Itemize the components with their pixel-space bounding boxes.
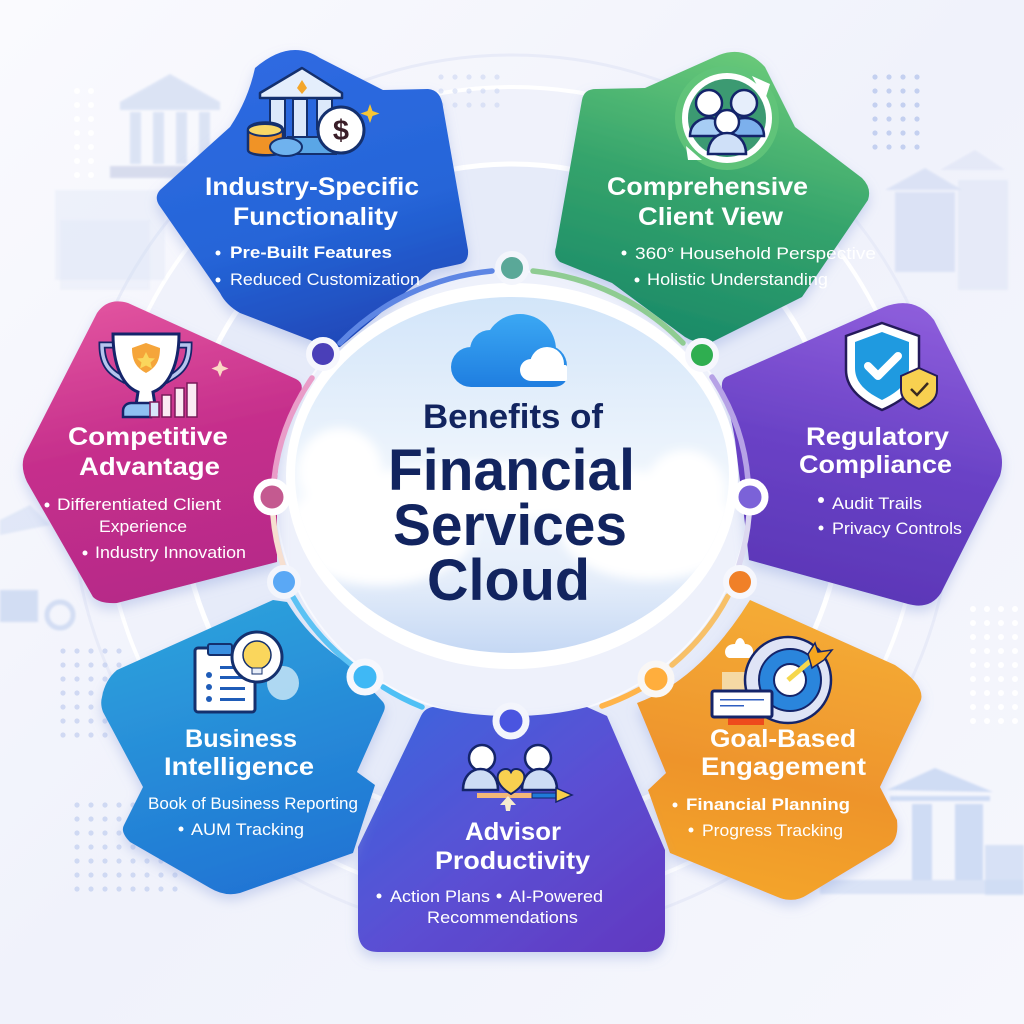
icon: trophy: [102, 334, 228, 417]
bullets: 360° Household Perspective: [635, 244, 876, 263]
heading: Business: [185, 725, 297, 753]
title: Financial: [388, 438, 635, 503]
heading: [205, 173, 419, 231]
heading: Client View: [638, 203, 784, 231]
bullets: Industry Innovation: [95, 543, 246, 562]
bullets: [818, 494, 962, 538]
heading: Compliance: [799, 451, 952, 479]
heading: [607, 173, 808, 231]
heading: [701, 725, 867, 781]
panel: competitive advantage: [23, 301, 302, 603]
heading: [68, 423, 228, 481]
bullets: [672, 795, 850, 840]
panel shape: [358, 707, 665, 952]
bullets: Book of Business Reporting: [148, 794, 358, 813]
icon: clipboard and bulb: [195, 632, 299, 712]
heading: Advisor: [465, 818, 561, 846]
heading: Industry-Specific: [205, 173, 419, 201]
connector nodes: [257, 254, 765, 736]
bullets: Experience: [99, 517, 187, 536]
heading: Goal-Based: [710, 725, 856, 753]
icon: cloud: [451, 314, 567, 387]
bullets: Financial Planning: [686, 795, 850, 814]
bullets: Pre-Built Features: [230, 243, 392, 262]
panel shape: [23, 301, 302, 603]
bullets: [44, 495, 246, 562]
faint building upper right: [885, 150, 1008, 290]
bullets: Audit Trails: [832, 494, 922, 513]
heading: Advantage: [79, 453, 220, 481]
heading: Functionality: [233, 203, 398, 231]
heading: Productivity: [435, 847, 590, 875]
panel: industry-specific functionality: [157, 50, 468, 347]
faint bank lower right: [820, 768, 1024, 895]
icon: shield: [846, 323, 937, 410]
bullets: [148, 794, 358, 839]
heading: Intelligence: [164, 753, 314, 781]
central ring arcs: [273, 271, 749, 707]
bullets: Progress Tracking: [702, 821, 843, 840]
bullets: AI-Powered: [509, 887, 603, 906]
faint chart left: [0, 505, 73, 628]
bullets: Differentiated Client: [57, 495, 221, 514]
title: Cloud: [427, 548, 590, 613]
panel: advisor productivity: [358, 707, 665, 952]
bullets: [622, 244, 876, 289]
bullets: Recommendations: [427, 908, 578, 927]
bullets: [216, 243, 420, 289]
panel shape: [157, 50, 468, 347]
bullets: Action Plans: [390, 887, 490, 906]
heading: [164, 725, 314, 781]
title: [388, 398, 635, 613]
heading: [435, 818, 590, 875]
heading: Regulatory: [806, 423, 949, 451]
bullets: [376, 887, 603, 927]
icon: client group: [675, 66, 779, 170]
node ring band: [276, 271, 748, 719]
panel shape: [722, 303, 1002, 606]
bullets: Holistic Understanding: [647, 270, 828, 289]
title: Benefits of: [423, 398, 604, 436]
icon: bank: $: [333, 115, 349, 147]
icon: advisors: [463, 745, 572, 811]
hub clouds: [285, 428, 740, 585]
panel shape: [101, 600, 385, 894]
panel shape: [637, 600, 921, 900]
panel: regulatory compliance: [722, 303, 1002, 606]
bullets: Reduced Customization: [230, 270, 420, 289]
panel: comprehensive client view: [555, 52, 876, 343]
panel: goal-based engagement: [637, 600, 921, 900]
panel shape: [555, 52, 869, 343]
panel: business intelligence: [101, 600, 385, 894]
icon: bank: [248, 68, 380, 156]
faint bank left: [55, 74, 230, 290]
dot grids: [56, 70, 1022, 896]
heading: Engagement: [701, 753, 867, 781]
heading: Competitive: [68, 423, 228, 451]
title: Services: [393, 493, 627, 558]
bullets: AUM Tracking: [191, 820, 304, 839]
background rings: [72, 55, 952, 935]
icon: target: [712, 637, 832, 725]
central hub: [285, 283, 740, 669]
bullets: Privacy Controls: [832, 519, 962, 538]
heading: Comprehensive: [607, 173, 808, 201]
heading: [799, 423, 952, 479]
